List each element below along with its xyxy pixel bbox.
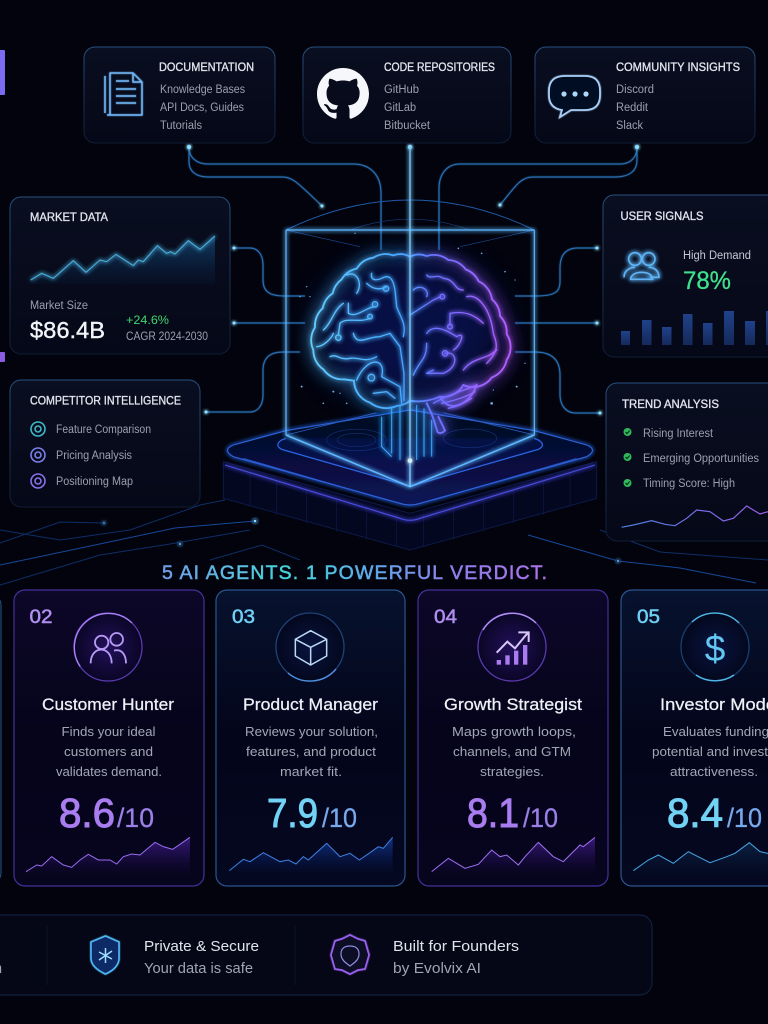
competitor list: Pricing Analysis	[56, 450, 132, 462]
card text: Finds your ideal	[62, 725, 156, 739]
panel: documentation	[84, 47, 275, 143]
panel: competitor intelligence	[10, 380, 200, 507]
icon: cube	[276, 613, 344, 681]
code repositories text: Bitbucket	[384, 120, 431, 132]
card: product manager	[216, 590, 405, 886]
documentation text: API Docs, Guides	[160, 102, 244, 114]
score: 8.6	[59, 790, 115, 836]
trend list: Emerging Opportunities	[643, 453, 759, 465]
card text	[42, 695, 174, 779]
card: growth strategist	[418, 590, 608, 886]
icon: shield	[91, 936, 119, 974]
card text: market fit.	[280, 765, 342, 779]
competitor list	[56, 424, 151, 488]
card: investor mode	[621, 590, 768, 886]
panel: market data	[10, 197, 230, 354]
competitor list: Feature Comparison	[56, 424, 151, 436]
community insights text	[616, 62, 740, 132]
documentation text: Knowledge Bases	[160, 84, 245, 96]
icon: github	[317, 68, 369, 119]
card text: channels, and GTM	[453, 745, 571, 759]
glass cube back faces and floor rings	[286, 200, 534, 451]
card text	[652, 695, 768, 779]
panel: code repositories	[303, 47, 511, 143]
card text: validates demand.	[56, 765, 162, 779]
community insights text: Slack	[616, 120, 643, 132]
trend list: Timing Score: High	[643, 478, 735, 490]
sparkline	[26, 837, 190, 875]
connector lines	[187, 145, 639, 414]
sparkline	[229, 837, 393, 875]
high demand metric: 78%	[683, 267, 731, 295]
trend list: Rising Interest	[643, 428, 714, 440]
number 03: 03	[232, 607, 255, 628]
sparkline	[633, 843, 768, 875]
footer bar	[0, 915, 652, 995]
score: 8.4	[667, 790, 723, 836]
code repositories text: GitLab	[384, 102, 416, 114]
trend list	[643, 428, 759, 490]
built for founders text: Built for Founders	[393, 939, 519, 955]
card text	[243, 695, 378, 779]
private and secure text	[144, 939, 259, 977]
score: /10	[523, 803, 558, 833]
brain outline	[311, 254, 511, 433]
documentation text: DOCUMENTATION	[159, 62, 254, 74]
user signals heading: USER SIGNALS	[620, 211, 704, 223]
market data heading: MARKET DATA	[30, 212, 108, 224]
number 02: 02	[30, 607, 52, 628]
sparkline	[432, 837, 595, 875]
card text: Customer Hunter	[42, 695, 174, 714]
market size figures: CAGR 2024-2030	[126, 331, 208, 343]
icon: founders badge	[331, 935, 369, 974]
market size figures: $86.4B	[30, 317, 105, 343]
market size figures: +24.6%	[126, 313, 169, 327]
number 04: 04	[434, 607, 457, 628]
community insights text: Discord	[616, 84, 654, 96]
card 01 edge	[0, 594, 1, 884]
icon: customers	[74, 613, 142, 681]
community insights text: COMMUNITY INSIGHTS	[616, 62, 740, 74]
card text: Investor Mode	[660, 695, 768, 714]
score: /10	[117, 803, 154, 833]
card text: Product Manager	[243, 695, 378, 714]
trend heading: TREND ANALYSIS	[622, 399, 719, 411]
card: customer hunter	[14, 590, 204, 886]
competitor list icons	[31, 422, 45, 488]
score	[467, 790, 558, 836]
brain glow backdrop	[317, 258, 503, 402]
private and secure text: Private & Secure	[144, 939, 259, 955]
cube front edges	[286, 147, 534, 487]
panel: community insights	[535, 47, 755, 143]
high demand metric	[683, 250, 751, 295]
card text: Maps growth loops,	[452, 725, 576, 739]
line chart: market growth	[31, 236, 215, 284]
documentation text	[159, 62, 254, 132]
score	[267, 790, 357, 836]
bar chart: signals	[621, 311, 768, 345]
icon: users	[624, 253, 659, 279]
code repositories text	[384, 62, 495, 132]
score: 8.1	[467, 790, 519, 836]
number 05: 05	[637, 607, 660, 628]
card text: Growth Strategist	[444, 695, 582, 714]
panel: user signals	[603, 195, 768, 357]
central brain in glass cube on platform	[223, 147, 597, 550]
icon: dollar: $	[705, 628, 725, 669]
market size figures: Market Size	[30, 300, 88, 312]
built for founders text: by Evolvix AI	[393, 961, 481, 977]
score: 7.9	[267, 790, 318, 836]
built for founders text	[393, 939, 519, 977]
heading: 5 AI agents verdict: 5 AI AGENTS. 1 POWERFUL VERDICT.	[162, 562, 547, 584]
traces below brain	[382, 405, 432, 460]
trend check icons	[624, 428, 632, 487]
private and secure text: Your data is safe	[144, 961, 253, 977]
card text: Evaluates funding	[663, 725, 768, 739]
card text: attractiveness.	[670, 765, 758, 779]
card text: features, and product	[246, 745, 377, 759]
particles	[299, 233, 526, 405]
card text: potential and investor	[652, 745, 768, 759]
high demand metric: High Demand	[683, 250, 751, 262]
line chart: trend	[622, 506, 768, 527]
card text: strategies.	[480, 765, 544, 779]
platform base	[223, 410, 597, 550]
panel: trend analysis	[606, 383, 768, 541]
market size figures	[30, 300, 208, 343]
floor circuit traces	[0, 500, 768, 585]
icon: growth chart	[478, 613, 546, 681]
card text: customers and	[64, 745, 153, 759]
community insights text: Reddit	[616, 102, 649, 114]
score: /10	[727, 803, 762, 833]
documentation text: Tutorials	[160, 120, 202, 132]
score	[59, 790, 154, 836]
competitor list: Positioning Map	[56, 476, 133, 488]
icon: document	[105, 73, 142, 115]
score: /10	[322, 803, 357, 833]
card text	[444, 695, 582, 779]
icon: chat bubble	[549, 76, 600, 117]
code repositories text: CODE REPOSITORIES	[384, 62, 495, 74]
left edge accent bars	[0, 50, 5, 362]
card text: Reviews your solution,	[245, 725, 378, 739]
icon: dollar	[681, 613, 749, 681]
score	[667, 790, 762, 836]
competitor heading: COMPETITOR INTELLIGENCE	[30, 396, 181, 408]
code repositories text: GitHub	[384, 84, 419, 96]
brain folds	[317, 273, 497, 408]
